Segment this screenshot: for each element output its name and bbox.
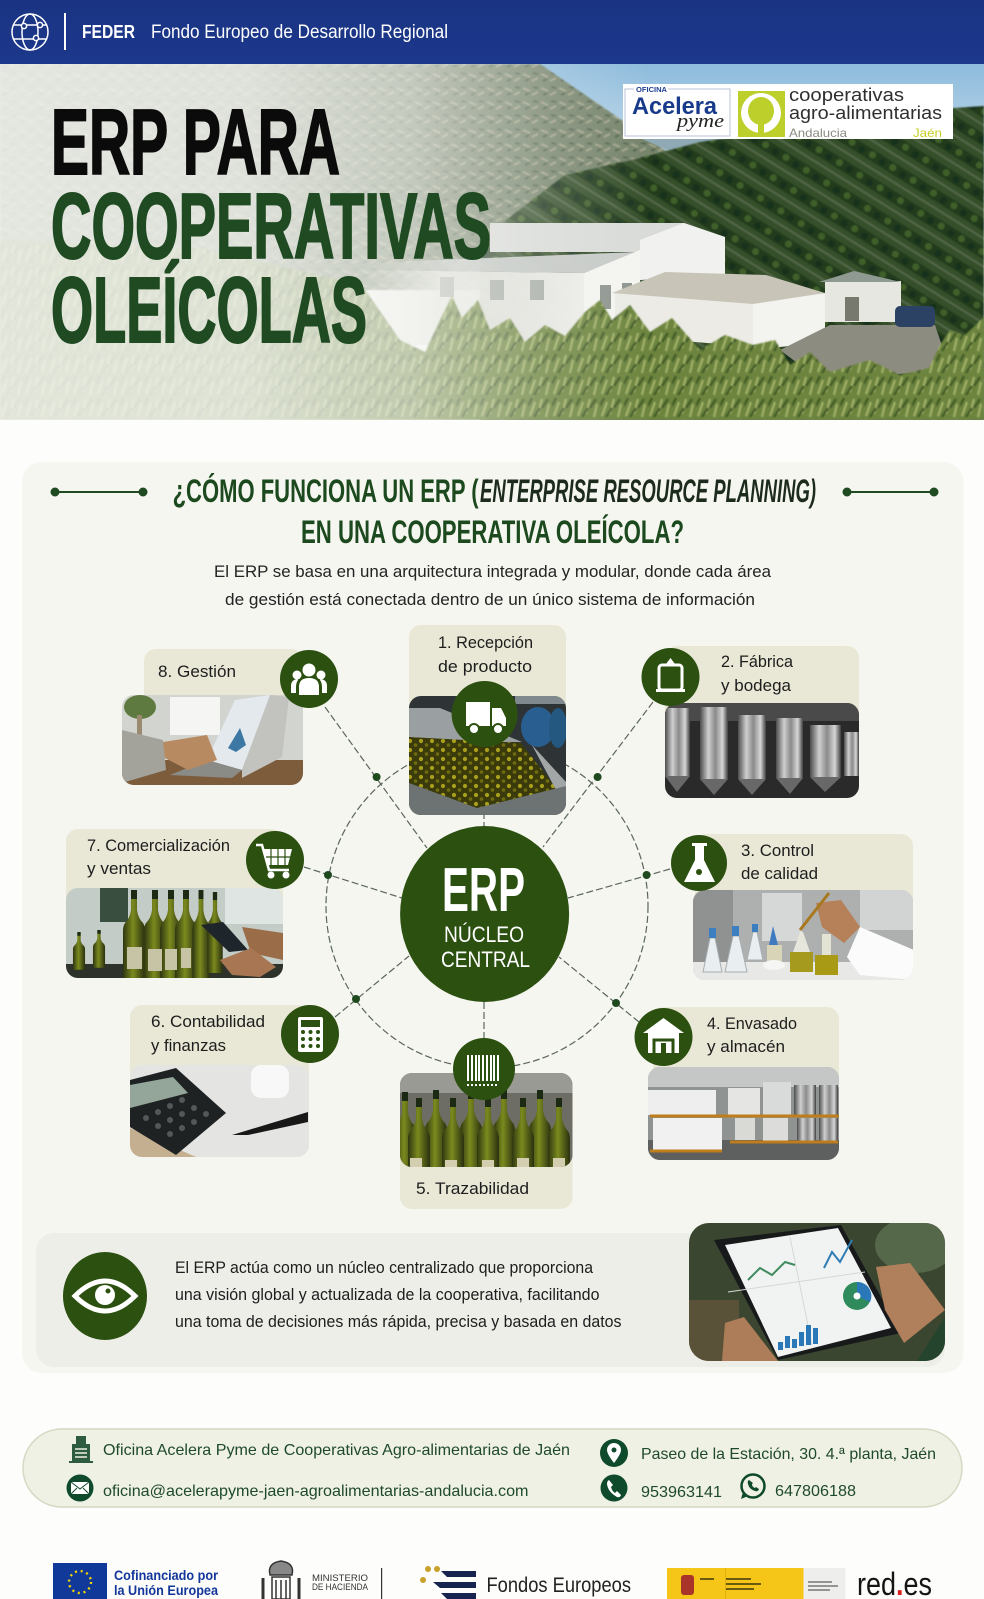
module 2: factory and cellar: y bodega (721, 676, 792, 695)
logo: government bar (667, 1568, 846, 1599)
office name: Oficina Acelera Pyme de Cooperativas Agro-alimentarias de Jaén (103, 1442, 570, 1459)
module 1: reception: de producto (438, 657, 532, 676)
callout text: una visión global y actualizada de la cooperativa, facilitando (175, 1286, 600, 1304)
Fondos Europeos text: Fondos Europeos (486, 1574, 631, 1597)
module 2: factory and cellar (642, 646, 859, 798)
FEDER label: FEDER (82, 22, 135, 42)
photo: steel tanks (665, 703, 859, 798)
module 7: sales (66, 829, 304, 980)
module 4: packaging and warehouse: 4. Envasado (707, 1014, 797, 1033)
logo: cooperativas agro-alimentarias: Jaén (913, 126, 942, 140)
EU co-funding text: la Unión Europea (114, 1582, 218, 1598)
EU co-funding text: Cofinanciado por (114, 1567, 218, 1583)
photo: oil bottles (400, 1073, 572, 1167)
icon: people (280, 650, 338, 708)
module 6: accounting and finance: y finanzas (151, 1036, 226, 1055)
email: oficina@acelerapyme-jaen-agroalimentarias-andalucia.com (103, 1483, 528, 1500)
intro text (214, 562, 772, 609)
header bar (0, 0, 984, 64)
module 4: packaging and warehouse (634, 1007, 839, 1160)
icon: mail (66, 1474, 94, 1502)
heading line 2: EN UNA COOPERATIVA OLEÍCOLA? (301, 514, 684, 550)
funding logos (53, 1561, 932, 1599)
module 6: accounting and finance (130, 1005, 339, 1157)
cooperative building (362, 223, 950, 380)
photo: bottles and tablet (66, 888, 283, 980)
phone number: 953963141 (641, 1484, 722, 1501)
olive grove hillside (480, 106, 984, 420)
icon: truck (452, 681, 518, 747)
logo divider (381, 1568, 382, 1599)
left white fade (0, 64, 631, 420)
logo: Fondos Europeos mark (420, 1566, 476, 1599)
module 3: quality control: de calidad (741, 864, 818, 883)
icon: phone (600, 1474, 628, 1502)
intro text: El ERP se basa en una arquitectura integrada y modular, donde cada área (214, 562, 772, 581)
logo: Acelera Pyme: OFICINA (636, 87, 667, 94)
photo: tablet dashboard (689, 1217, 955, 1361)
title line: ERP PARA: ERP PARA (51, 90, 340, 194)
photo: warehouse (648, 1067, 839, 1160)
icon: eye (63, 1252, 147, 1340)
module 5: traceability: 5. Trazabilidad (416, 1179, 529, 1198)
module 1: reception (409, 625, 567, 815)
partner logos (623, 84, 953, 140)
photo: lab flasks (693, 890, 914, 980)
logo: cooperativas agro-alimentarias: cooperativas (789, 85, 904, 105)
fund name: Fondo Europeo de Desarrollo Regional (151, 22, 448, 43)
diagram connectors (304, 702, 670, 1068)
module 3: quality control: 3. Control (741, 841, 814, 860)
logo: Spanish crest (263, 1561, 299, 1599)
ERP central hub (400, 826, 569, 1002)
mountain (0, 64, 720, 290)
module 4: packaging and warehouse: y almacén (707, 1037, 785, 1056)
logo: Acelera Pyme: Acelera (632, 93, 718, 120)
connector nodes (324, 773, 651, 1007)
icon: digital globe (12, 14, 48, 50)
logo: Acelera Pyme: pyme (675, 111, 724, 132)
module 8: management (122, 649, 338, 785)
logo: cooperativas agro-alimentarias (738, 85, 942, 140)
module 7: sales: 7. Comercialización (87, 836, 230, 855)
callout text: una toma de decisiones más rápida, precisa y basada en datos (175, 1313, 622, 1331)
panel: how an ERP works (22, 462, 964, 1373)
icon: flask (671, 835, 727, 891)
address: Paseo de la Estación, 30. 4.ª planta, Jaén (641, 1446, 936, 1463)
icon: shopping cart (246, 831, 304, 889)
sky (272, 64, 984, 194)
icon: warehouse (634, 1008, 692, 1066)
module 1: reception: 1. Recepción (438, 633, 533, 652)
section heading (173, 473, 816, 550)
intro text: de gestión está conectada dentro de un único sistema de información (225, 590, 755, 609)
foreground olive branches (0, 240, 984, 420)
module 2: factory and cellar: 2. Fábrica (721, 652, 794, 671)
EU co-funding text (114, 1567, 218, 1598)
icon: office building (69, 1436, 93, 1463)
logo: EU flag (53, 1563, 107, 1599)
logo: Acelera Pyme (625, 86, 730, 136)
title line: COOPERATIVAS: COOPERATIVAS (51, 174, 491, 278)
title line: OLEÍCOLAS: OLEÍCOLAS (51, 258, 367, 362)
contact bar (23, 1429, 962, 1507)
logo: cooperativas agro-alimentarias: agro-alimentarias (789, 103, 942, 123)
module 7: sales: y ventas (87, 859, 151, 878)
ministry text: MINISTERIO (312, 1573, 368, 1584)
heading line 1: ¿CÓMO FUNCIONA UN ERP ( (173, 473, 479, 509)
icon: barcode (453, 1038, 515, 1100)
whatsapp number: 647806188 (775, 1483, 856, 1500)
photo: calculator (130, 1065, 309, 1157)
ERP central hub: ERP (442, 856, 525, 925)
icon: tank (642, 648, 700, 706)
icon: calculator (281, 1005, 339, 1063)
callout text (175, 1259, 622, 1331)
heading ornaments (52, 488, 938, 496)
module 5: traceability (394, 1038, 572, 1209)
icon: whatsapp (741, 1474, 764, 1499)
hero banner (0, 64, 984, 420)
icon: location pin (600, 1439, 628, 1467)
photo: laptop (122, 695, 303, 785)
callout: global view (63, 1223, 945, 1361)
module 6: accounting and finance: 6. Contabilidad (151, 1012, 265, 1031)
ERP central hub: CENTRAL (441, 947, 530, 972)
ministry text: DE HACIENDA (312, 1582, 369, 1593)
ministry text (312, 1573, 369, 1593)
module 8: management: 8. Gestión (158, 662, 236, 681)
photo: olive conveyor (409, 696, 567, 815)
module 3: quality control (671, 834, 914, 980)
callout text: El ERP actúa como un núcleo centralizado que proporciona (175, 1259, 594, 1277)
ERP central hub: NÚCLEO (444, 922, 524, 947)
header divider (64, 13, 66, 50)
title (51, 90, 491, 362)
logo: cooperativas agro-alimentarias: Andalucia (789, 126, 847, 140)
